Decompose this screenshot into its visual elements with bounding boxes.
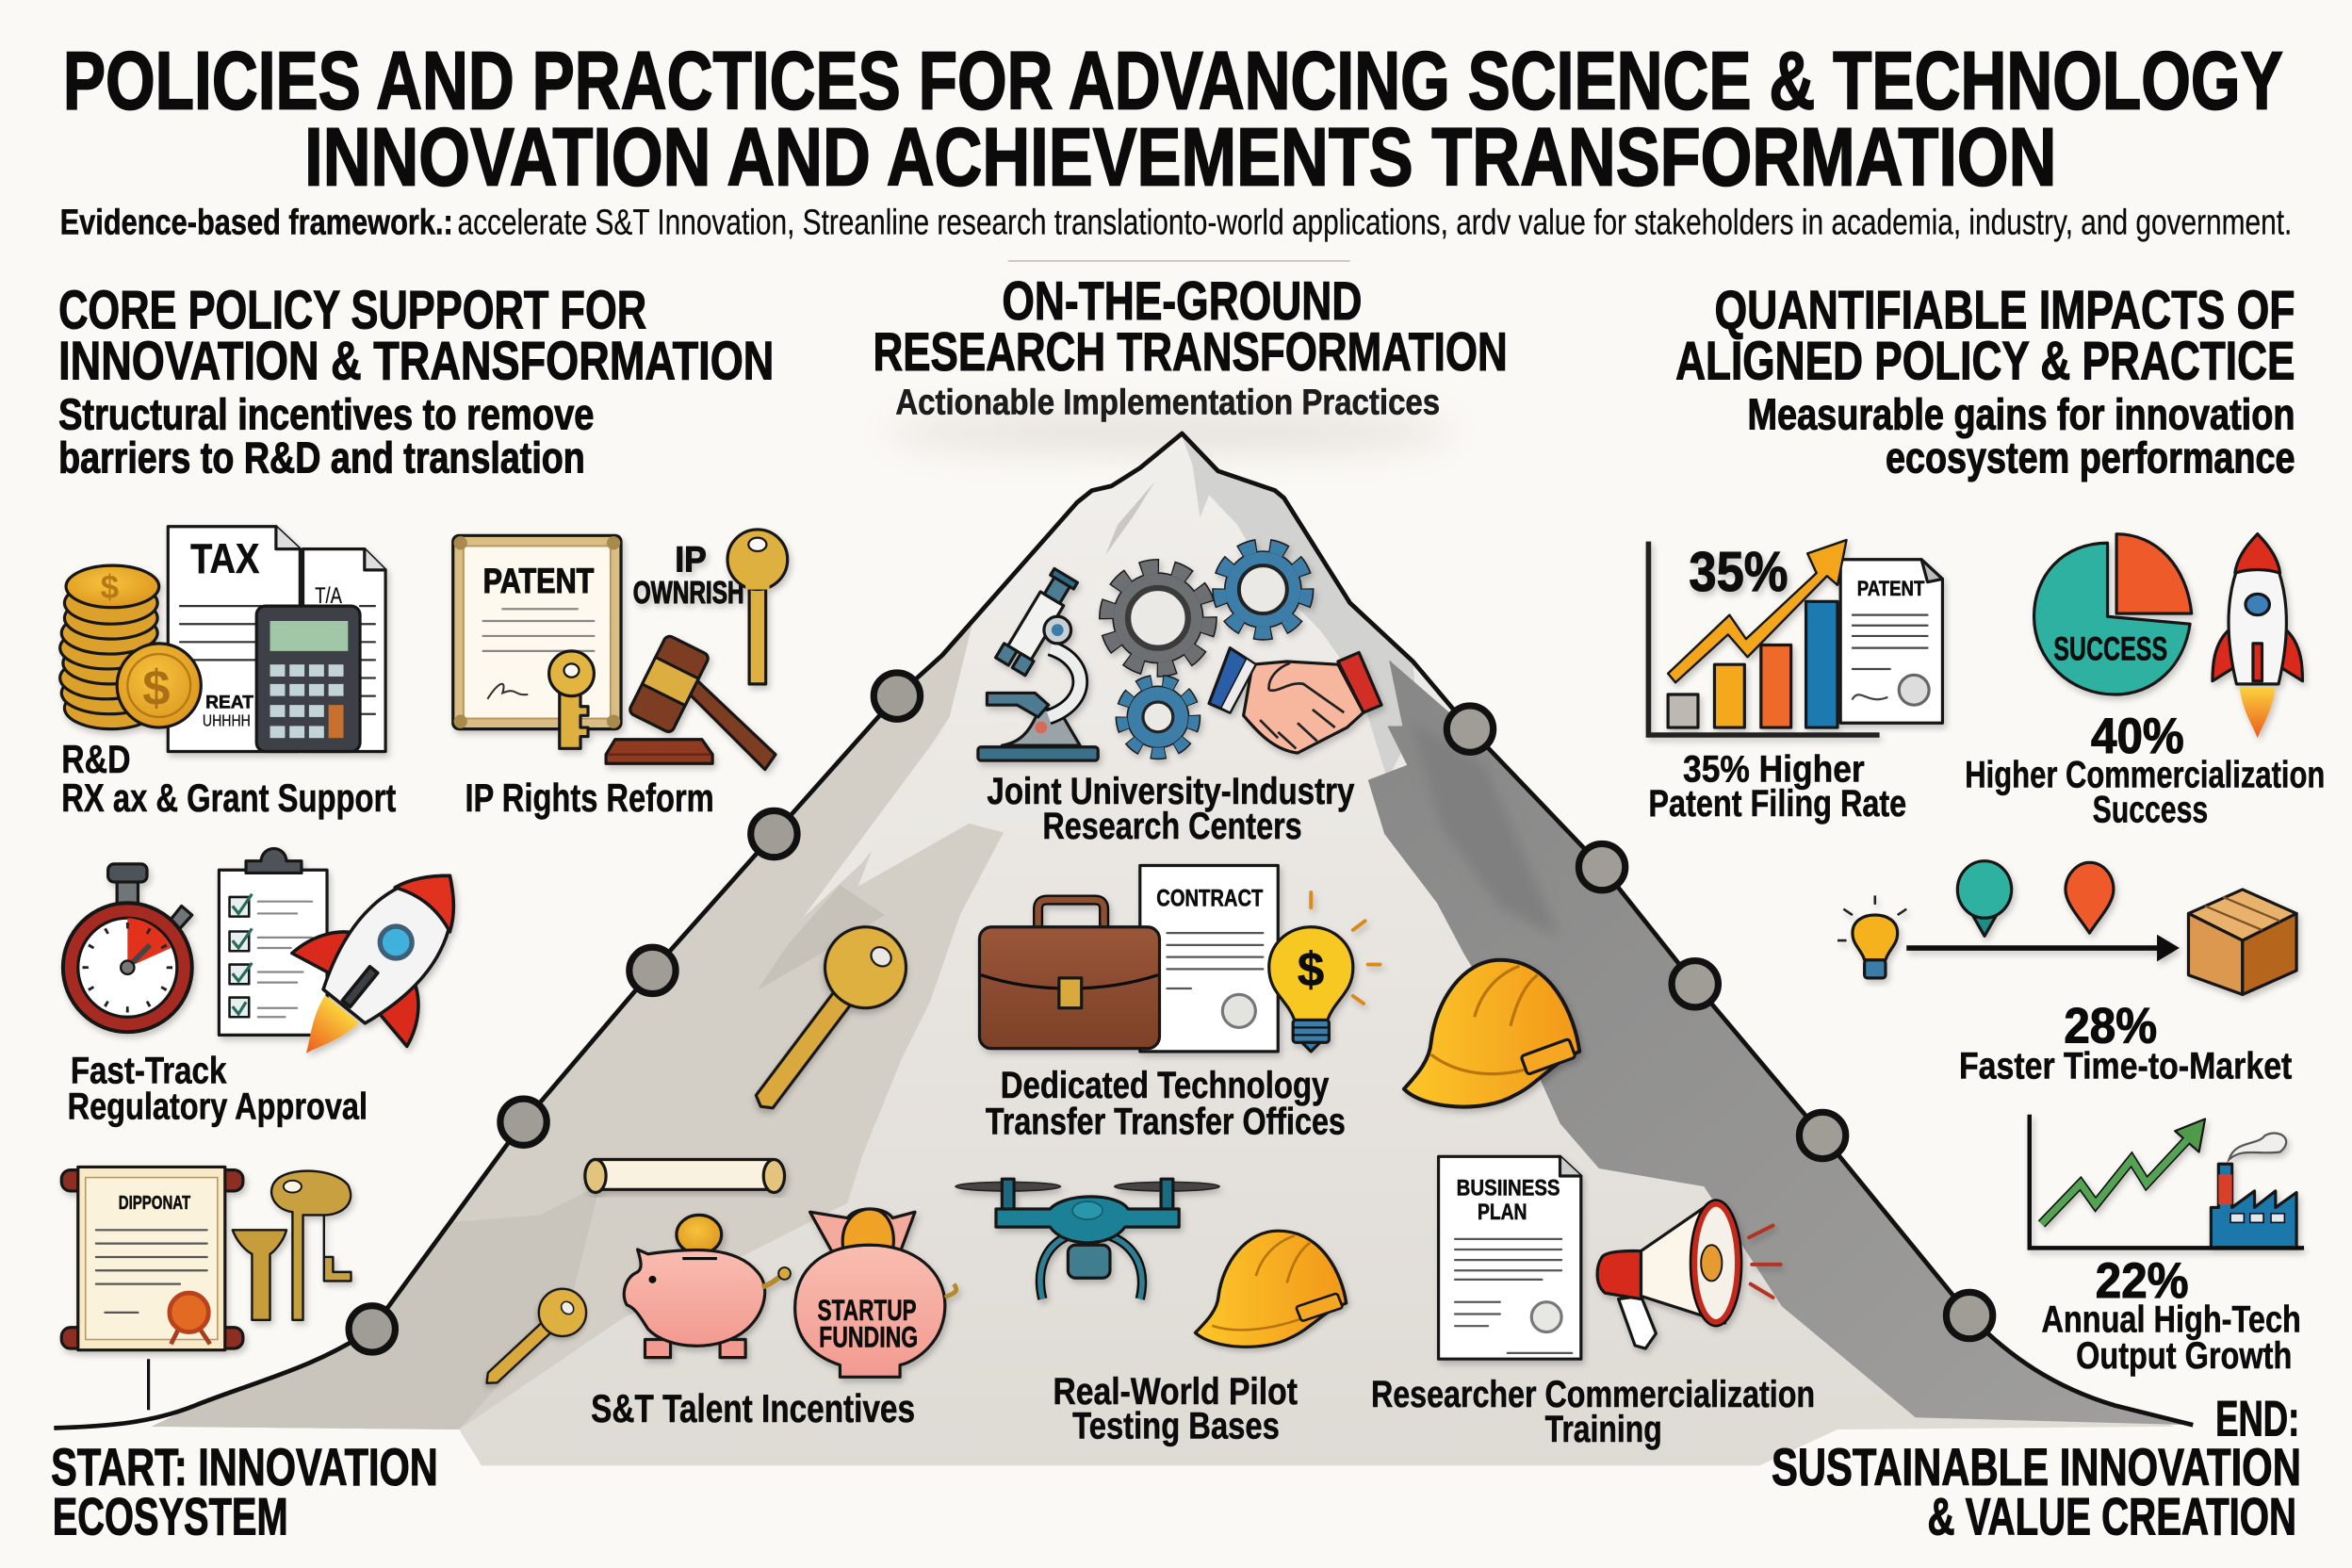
label: 28% faster time-to-market <box>1959 998 2292 1087</box>
icon: coins, tax documents and calculator: $ <box>101 569 119 606</box>
label: S&T talent incentives: S&T Talent Incentives <box>591 1387 915 1430</box>
label: joint university-industry research centers: Joint University-Industry <box>987 771 1354 812</box>
label: 22% annual high-tech output growth: Annual High-Tech <box>2041 1299 2301 1341</box>
center heading: RESEARCH TRANSFORMATION <box>873 322 1508 383</box>
label: researcher commercialization training <box>1371 1374 1815 1450</box>
icon: coins, tax documents and calculator: TAX <box>190 536 260 582</box>
chart: success pie: SUCCESS <box>2053 630 2167 667</box>
icon: briefcase, contract and lightbulb <box>979 865 1380 1052</box>
label: fast-track regulatory approval: Regulatory Approval <box>68 1086 368 1128</box>
icon: box <box>2188 890 2296 994</box>
label: start <box>51 1438 438 1545</box>
icon: business plan document: BUSIINESS <box>1457 1176 1560 1201</box>
icon: microscope, gears and handshake <box>978 546 1381 760</box>
label: fast-track regulatory approval <box>68 1050 368 1128</box>
panel: impacts heading <box>1675 281 2295 482</box>
icon: coins, tax documents and calculator <box>60 527 385 752</box>
label: researcher commercialization training: Training <box>1545 1409 1662 1450</box>
label: IP rights reform: IP Rights Reform <box>465 776 714 820</box>
panel: core policy heading <box>58 281 774 482</box>
chart: high-tech output growth <box>2030 1115 2304 1248</box>
panel: core policy heading: barriers to R&D and translation <box>58 433 585 482</box>
icon: startup funding piggy: STARTUP <box>818 1293 917 1327</box>
icon: large key <box>728 911 923 1131</box>
mountain <box>54 261 2193 1465</box>
icon: rocket <box>2213 534 2302 738</box>
label: dedicated technology transfer offices <box>986 1065 1346 1142</box>
chart: success pie <box>2034 534 2192 694</box>
label: start: ECOSYSTEM <box>53 1487 288 1545</box>
label: 40% higher commercialization success <box>1965 709 2325 830</box>
label: researcher commercialization training: Researcher Commercialization <box>1371 1374 1815 1415</box>
title <box>63 34 2283 204</box>
label: 28% faster time-to-market: 28% <box>2064 998 2157 1054</box>
icon: coins, tax documents and calculator: UHHHH <box>203 710 251 729</box>
label: R&D tax and grant support: RX ax & Grant Support <box>61 776 396 820</box>
label: real-world pilot testing bases <box>1053 1371 1298 1447</box>
panel: core policy heading: INNOVATION & TRANSFORMATION <box>58 332 774 392</box>
panel: core policy heading: Structural incentives to remove <box>58 389 594 438</box>
icon: business plan document <box>1439 1156 1581 1359</box>
text: IP ownership: IP <box>675 539 707 580</box>
label: 35% higher patent filing rate: Patent Filing Rate <box>1648 783 1906 825</box>
chart: 35% patent filing rate: PATENT <box>1857 577 1925 600</box>
label: 28% faster time-to-market: Faster Time-to-Market <box>1959 1046 2292 1087</box>
subtitle: Evidence-based framework.: <box>60 202 453 242</box>
icon: briefcase, contract and lightbulb: CONTRACT <box>1156 886 1263 911</box>
icon: patent certificate, key and gavel: PATENT <box>483 562 594 600</box>
center heading: Actionable Implementation Practices <box>895 382 1440 422</box>
icon: startup funding piggy: FUNDING <box>819 1319 918 1353</box>
icon: scroll <box>585 1159 785 1193</box>
label: R&D tax and grant support: R&D <box>61 738 130 781</box>
label: end <box>1772 1391 2301 1545</box>
path nodes <box>349 673 1993 1352</box>
text: IP ownership <box>633 539 744 611</box>
label: fast-track regulatory approval: Fast-Track <box>71 1050 227 1091</box>
icon: briefcase, contract and lightbulb: $ <box>1298 942 1324 996</box>
icon: piggy bank <box>624 1215 791 1358</box>
label: 35% higher patent filing rate: 35% Higher <box>1683 748 1865 790</box>
center heading <box>873 271 1508 422</box>
label: dedicated technology transfer offices: Transfer Transfer Offices <box>986 1101 1346 1142</box>
icon: diploma and keys: DIPPONAT <box>119 1192 190 1214</box>
center heading: ON-THE-GROUND <box>1002 271 1362 332</box>
icon: coins, tax documents and calculator: REAT <box>205 693 253 712</box>
icon: diploma and keys <box>61 1167 351 1350</box>
label: 35% higher patent filing rate <box>1648 748 1906 825</box>
icon: coins, tax documents and calculator: T/A <box>315 583 342 609</box>
label: 22% annual high-tech output growth <box>2041 1253 2301 1377</box>
icon: hard hat upper <box>1404 960 1579 1107</box>
label: real-world pilot testing bases: Testing Bases <box>1072 1406 1280 1447</box>
label: dedicated technology transfer offices: Dedicated Technology <box>1001 1065 1329 1106</box>
label: R&D tax and grant support <box>61 738 396 820</box>
label: 40% higher commercialization success: Success <box>2093 789 2208 830</box>
text: IP ownership: OWNRISH <box>633 576 744 611</box>
icon: business plan document: PLAN <box>1478 1200 1527 1225</box>
label: 22% annual high-tech output growth: 22% <box>2096 1253 2188 1309</box>
icon: startup funding piggy <box>795 1209 956 1377</box>
panel: core policy heading: CORE POLICY SUPPORT FOR <box>58 281 646 341</box>
chart: 35% patent filing rate <box>1648 540 1942 735</box>
icon: lightbulb <box>1838 895 1906 978</box>
icon: small key <box>471 1279 596 1400</box>
icon: stopwatch, checklist and rocket <box>63 829 507 1100</box>
icon: drone <box>956 1179 1219 1299</box>
icon: patent certificate, key and gavel <box>453 530 788 770</box>
icon: coins, tax documents and calculator: $ <box>142 661 170 716</box>
label: joint university-industry research centers: Research Centers <box>1042 806 1302 847</box>
chart: 35% patent filing rate: 35% <box>1689 542 1788 603</box>
icon: megaphone <box>1597 1200 1781 1348</box>
chart: time to market timeline <box>1838 861 2296 994</box>
label: 40% higher commercialization success: 40% <box>2091 709 2184 764</box>
label: 22% annual high-tech output growth: Output Growth <box>2076 1335 2292 1377</box>
icon: hard hat lower <box>1195 1231 1347 1347</box>
label: joint university-industry research centers <box>987 771 1354 847</box>
label: start: START: INNOVATION <box>51 1438 438 1496</box>
label: real-world pilot testing bases: Real-World Pilot <box>1053 1371 1298 1413</box>
label: end: END: <box>2215 1391 2299 1446</box>
